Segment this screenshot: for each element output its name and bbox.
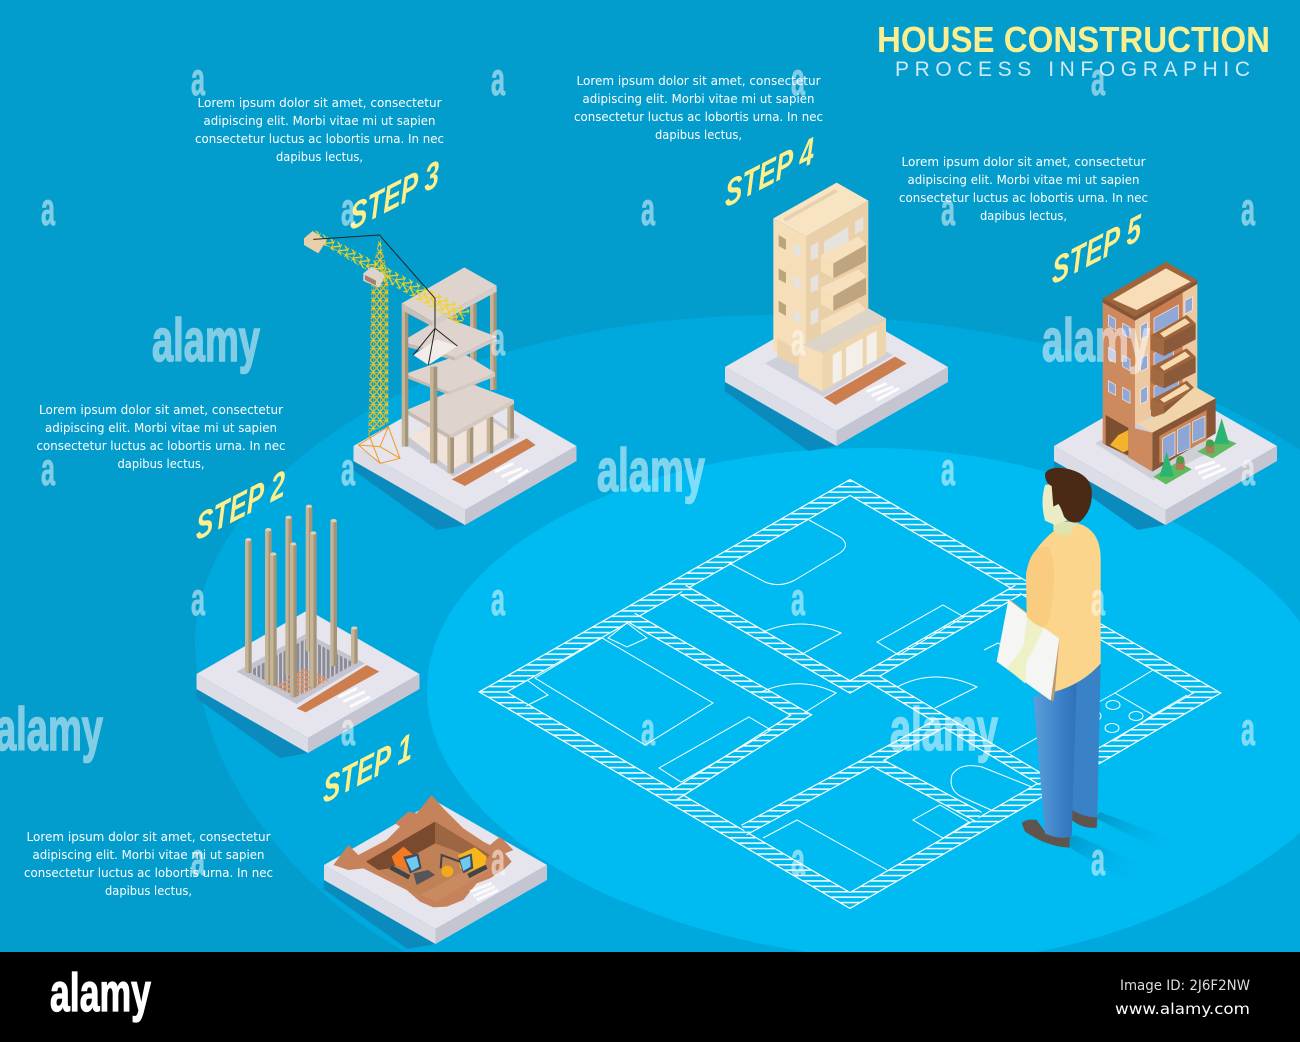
blueprint floor plan — [493, 488, 1207, 900]
text block step 2: adipiscing elit. Morbi vitae mi ut sapien — [45, 421, 277, 435]
concrete columns and slabs — [402, 267, 514, 473]
balconies — [821, 237, 866, 343]
lawns, trees and planters — [1153, 418, 1237, 484]
text block step 2 — [36, 403, 286, 471]
watermarks: alamy — [0, 696, 103, 763]
step 4 label: STEP 4 — [725, 128, 814, 216]
rebar columns — [245, 505, 358, 698]
watermarks: a — [491, 833, 505, 885]
step 1 label: STEP 1 — [323, 724, 412, 812]
text block step 4 — [574, 74, 823, 142]
text block step 4: dapibus lectus, — [655, 128, 742, 142]
tower — [773, 183, 868, 370]
watermarks: a — [791, 53, 805, 105]
text block step 5: dapibus lectus, — [980, 209, 1067, 223]
furniture outlines — [526, 520, 1187, 870]
excavation pit and machines — [333, 795, 513, 907]
title: HOUSE CONSTRUCTION — [877, 19, 1270, 60]
folder — [997, 599, 1063, 702]
watermarks: a — [791, 573, 805, 625]
text block step 3: consectetur luctus ac lobortis urna. In nec — [195, 132, 444, 146]
brick tower — [1103, 262, 1197, 460]
podium — [798, 308, 886, 392]
watermarks: alamy — [890, 696, 998, 763]
watermarks: a — [1091, 573, 1105, 625]
watermarks: a — [1241, 443, 1255, 495]
platform step 4: plastered building — [724, 183, 948, 451]
footer band: www.alamy.com — [1115, 1000, 1250, 1018]
platform step 3: frame and crane — [304, 230, 576, 530]
watermarks: a — [1091, 53, 1105, 105]
icon: yellow car — [1110, 430, 1128, 452]
watermarks: alamy — [597, 437, 705, 504]
text block step 5: Lorem ipsum dolor sit amet, consectetur — [902, 155, 1146, 169]
watermarks: a — [41, 183, 55, 235]
balconies — [1151, 315, 1196, 422]
torso — [1027, 523, 1101, 692]
watermarks: a — [1241, 183, 1255, 235]
text block step 1: dapibus lectus, — [105, 884, 192, 898]
text block step 3: Lorem ipsum dolor sit amet, consectetur — [198, 96, 442, 110]
icon: orange excavator — [391, 847, 435, 885]
watermarks: alamy — [1042, 307, 1150, 374]
text block step 1: consectetur luctus ac lobortis urna. In nec — [24, 866, 273, 880]
trousers — [1033, 663, 1101, 838]
person holding blueprints — [997, 468, 1200, 895]
shoes — [1022, 807, 1097, 848]
text block step 5: consectetur luctus ac lobortis urna. In nec — [899, 191, 1148, 205]
person shadow — [1060, 812, 1200, 895]
footer band: Image ID: 2J6F2NW — [1120, 978, 1250, 994]
text block step 4: Lorem ipsum dolor sit amet, consectetur — [576, 74, 821, 88]
podium — [1128, 387, 1216, 472]
watermarks: a — [341, 703, 355, 755]
outer ground ellipse — [195, 315, 1300, 952]
watermarks: a — [341, 183, 355, 235]
text block step 2: dapibus lectus, — [118, 457, 204, 471]
head — [1042, 468, 1092, 535]
title: PROCESS INFOGRAPHIC — [895, 58, 1250, 81]
text block step 4: adipiscing elit. Morbi vitae mi ut sapien — [582, 92, 814, 106]
icon: yellow excavator — [441, 847, 487, 877]
watermarks: a — [491, 573, 505, 625]
watermarks: a — [941, 183, 955, 235]
text block step 2: consectetur luctus ac lobortis urna. In nec — [36, 439, 286, 453]
footer band: alamy — [50, 963, 151, 1023]
watermarks: a — [791, 833, 805, 885]
text block step 5 — [899, 155, 1148, 223]
footer band — [0, 952, 1300, 1042]
watermarks: a — [1241, 703, 1255, 755]
platform step 5: finished building — [1054, 262, 1277, 530]
watermarks: a — [1091, 833, 1105, 885]
watermarks: a — [791, 313, 805, 365]
watermarks: a — [491, 313, 505, 365]
text block step 4: consectetur luctus ac lobortis urna. In nec — [574, 110, 823, 124]
text block step 3 — [195, 96, 444, 164]
text block step 5: adipiscing elit. Morbi vitae mi ut sapien — [908, 173, 1140, 187]
tower crane — [304, 230, 470, 463]
watermarks: alamy — [152, 307, 260, 374]
step 3 label: STEP 3 — [350, 151, 439, 239]
text block step 1 — [24, 830, 273, 898]
watermarks: a — [191, 833, 205, 885]
text block step 1: Lorem ipsum dolor sit amet, consectetur — [26, 830, 271, 844]
watermarks: a — [941, 443, 955, 495]
platform step 1: excavation — [324, 795, 547, 949]
step 5 label: STEP 5 — [1052, 205, 1142, 293]
watermarks: a — [641, 183, 655, 235]
platform step 2: reinforced foundation — [196, 505, 420, 758]
watermarks: a — [641, 703, 655, 755]
watermarks — [0, 53, 1255, 885]
arm — [1007, 546, 1054, 683]
inner ground ellipse — [427, 448, 1300, 962]
watermarks: a — [191, 573, 205, 625]
step 2 label: STEP 2 — [196, 461, 285, 549]
watermarks: a — [41, 443, 55, 495]
text block step 1: adipiscing elit. Morbi vitae mi ut sapien — [32, 848, 264, 862]
watermarks: a — [491, 53, 505, 105]
watermarks: a — [341, 443, 355, 495]
title — [877, 19, 1270, 81]
watermarks: a — [191, 53, 205, 105]
text block step 2: Lorem ipsum dolor sit amet, consectetur — [39, 403, 283, 417]
text block step 3: dapibus lectus, — [276, 150, 363, 164]
text block step 3: adipiscing elit. Morbi vitae mi ut sapien — [204, 114, 436, 128]
